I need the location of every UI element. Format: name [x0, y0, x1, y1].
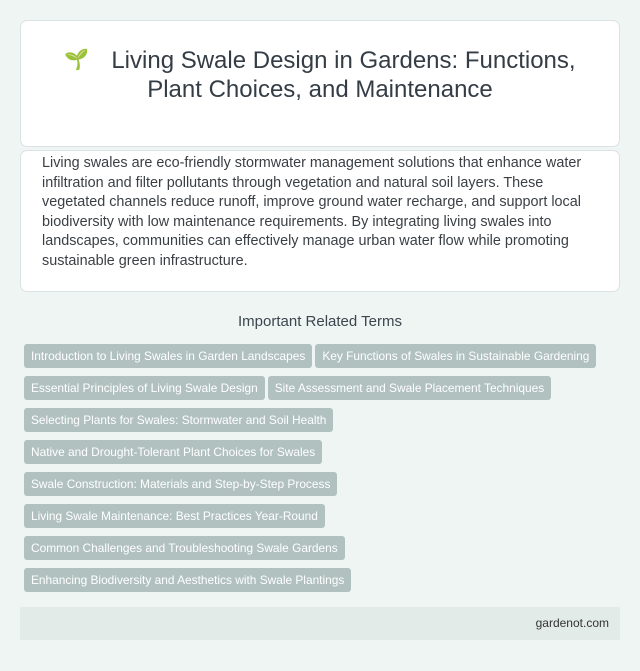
- related terms tags: [24, 344, 596, 592]
- related terms tags: Swale Construction: Materials and Step-by-Step Process: [31, 477, 330, 491]
- related terms tags: Native and Drought-Tolerant Plant Choices for Swales: [31, 445, 315, 459]
- description text: Living swales are eco-friendly stormwater management solutions that enhance water infiltration and filter pollutants through vegetation and natural soil layers. These vegetated channels reduce runoff, improve ground water recharge, and support local biodiversity with low maintenance requirements. By integrating living swales into landscapes, communities can effectively manage urban water flow while promoting sustainable green infrastructure.: [42, 155, 581, 268]
- related terms tags: Selecting Plants for Swales: Stormwater and Soil Health: [31, 413, 326, 427]
- related terms tags: Site Assessment and Swale Placement Techniques: [275, 381, 544, 395]
- related terms tags: Living Swale Maintenance: Best Practices Year-Round: [31, 509, 318, 523]
- footer: gardenot.com: [536, 616, 609, 630]
- title: [64, 47, 576, 103]
- related terms tags: Introduction to Living Swales in Garden Landscapes: [31, 349, 305, 363]
- related terms tags: Enhancing Biodiversity and Aesthetics with Swale Plantings: [31, 573, 344, 587]
- title card: [20, 20, 620, 147]
- title: 🌱 Living Swale Design in Gardens: Functions,: [64, 47, 576, 74]
- related terms tags: Common Challenges and Troubleshooting Swale Gardens: [31, 541, 338, 555]
- footer: [20, 607, 620, 640]
- related terms heading: Important Related Terms: [238, 313, 402, 330]
- related terms tags: Key Functions of Swales in Sustainable Gardening: [322, 349, 589, 363]
- description card: [20, 150, 620, 292]
- title: Plant Choices, and Maintenance: [147, 76, 493, 103]
- related terms tags: Essential Principles of Living Swale Design: [31, 381, 258, 395]
